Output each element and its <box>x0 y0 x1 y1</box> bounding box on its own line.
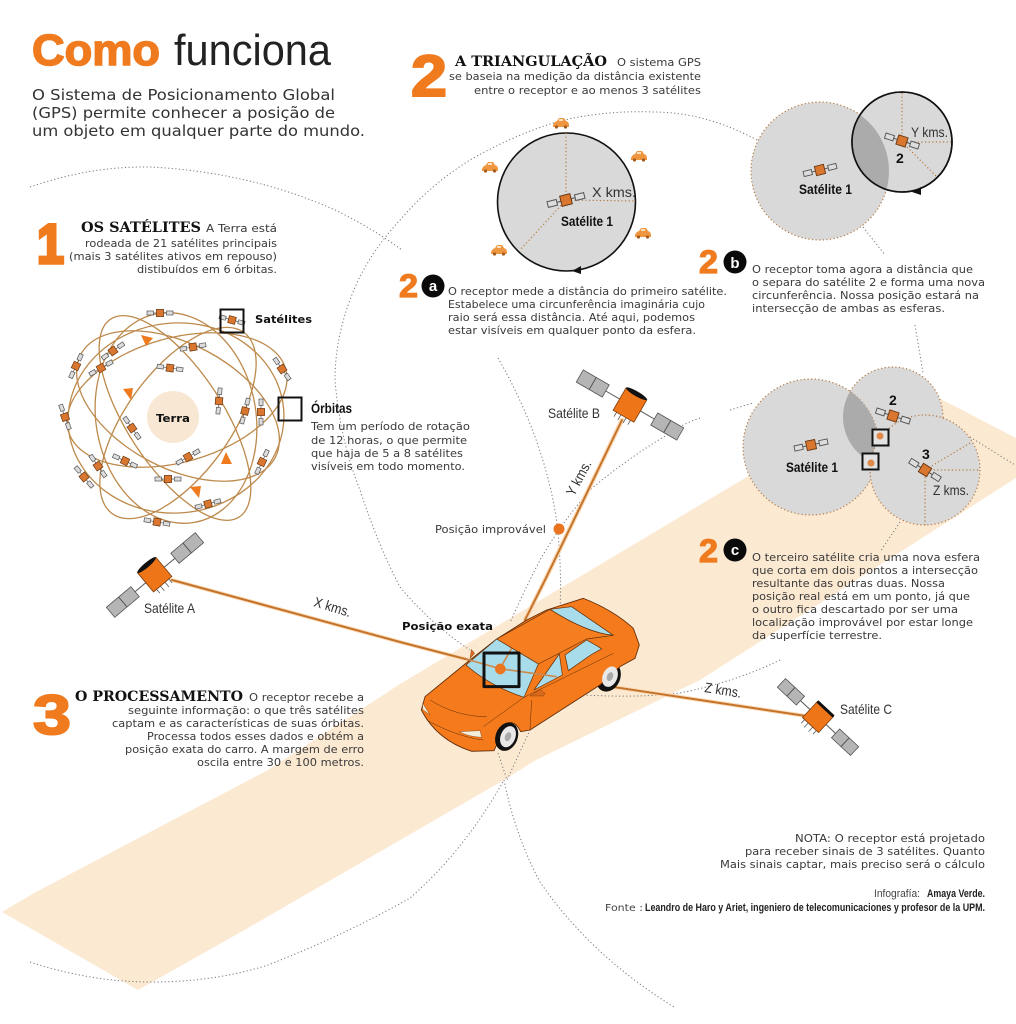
satellite A: Satélite A <box>144 600 196 616</box>
section 2 heading: 2 <box>411 44 447 109</box>
diagram 2b: two spheres: Y kms. <box>911 124 948 140</box>
windshield <box>466 639 538 697</box>
label 2a and text: estar visíveis em qualquer ponto da esfera. <box>448 324 696 337</box>
credits <box>605 888 985 914</box>
label 2c and text: posição real está em um ponto, já que <box>752 590 970 603</box>
intro text <box>32 86 365 140</box>
section 3: seguinte informação: o que três satélites <box>128 704 364 717</box>
title <box>32 26 331 75</box>
note: Mais sinais captar, mais preciso será o cálculo <box>720 858 985 871</box>
title: funciona <box>174 26 331 75</box>
diagram 2c: three spheres: Z kms. <box>933 482 969 498</box>
orbits marker and text: visíveis em todo momento. <box>311 460 465 473</box>
diagram 2b: two spheres <box>751 92 952 240</box>
label 2c and text: que corta em dois pontos a intersecção <box>752 564 978 577</box>
label 2b and text: intersecção de ambas as esferas. <box>752 302 945 315</box>
diagram 2a: one sphere <box>482 118 651 274</box>
lines through the windshield <box>466 648 557 677</box>
orbit diagram <box>51 293 304 544</box>
satellite B <box>548 363 688 450</box>
diagram 2b: two spheres: 2 <box>896 150 904 166</box>
credits: Amaya Verde. <box>927 888 985 900</box>
exact position marker <box>495 664 506 674</box>
section 3: O receptor recebe a <box>249 691 364 704</box>
intersection <box>852 116 889 189</box>
label 2a and text: O receptor mede a distância do primeiro satélite. <box>448 285 727 298</box>
label 2b and text: o separa do satélite 2 e forma uma nova <box>752 276 985 289</box>
orbits marker and text: Órbitas <box>311 399 352 416</box>
section 3: captam e as características de suas órbitas. <box>112 717 364 730</box>
satellite C: Satélite C <box>840 701 892 717</box>
label 2b and text <box>699 244 985 315</box>
orbits marker and text: Tem um período de rotação <box>310 420 470 433</box>
note: NOTA: O receptor está projetado <box>795 832 985 845</box>
label 2b and text: 2 <box>699 244 718 280</box>
section 3: 3 <box>33 683 71 746</box>
diagram 2b: two spheres: Satélite 1 <box>799 181 852 197</box>
headlights <box>459 731 482 737</box>
roof <box>497 609 613 664</box>
label 2a and text: a <box>429 278 438 295</box>
side windows <box>534 654 562 690</box>
section 1 heading: (mais 3 satélites ativos em repouso) <box>69 250 277 263</box>
section 3: Processa todos esses dados e obtém a <box>147 730 364 743</box>
intersection <box>843 392 876 456</box>
intro text: (GPS) permite conhecer a posição de <box>32 104 335 122</box>
label 2b and text: b <box>730 255 740 272</box>
exact position label: Posição exata <box>402 620 493 633</box>
label 2c and text: 2 <box>699 533 718 569</box>
label 2a and text: Estabelece uma circunferência imaginária cujo <box>448 298 705 311</box>
wheels <box>491 719 522 754</box>
section 2 heading: entre o receptor e ao menos 3 satélites <box>474 84 701 97</box>
orbits marker and text: de 12 horas, o que permite <box>311 434 467 447</box>
label 2c and text: O terceiro satélite cria uma nova esfera <box>752 551 980 564</box>
label 2a and text: raio será essa distância. Até aqui, podemos <box>448 311 695 324</box>
orbits marker and text: que haja de 5 a 8 satélites <box>311 447 463 460</box>
earth label: Terra <box>156 412 190 425</box>
diagram 2c: three spheres <box>743 367 980 525</box>
label 2b and text: circunferência. Nossa posição estará na <box>752 289 979 302</box>
orbits <box>51 293 304 544</box>
section 2 heading: O sistema GPS <box>617 56 701 69</box>
note: para receber sinais de 3 satélites. Quanto <box>745 845 985 858</box>
label 2a and text <box>399 268 727 337</box>
intersection point markers <box>862 430 888 470</box>
section 3 <box>33 683 364 769</box>
credits: Infografía: <box>874 888 920 900</box>
rear wheel <box>591 658 625 695</box>
section 3: posição exata do carro. A margem de erro <box>125 743 364 756</box>
section 1 heading: OS SATÉLITES <box>81 218 201 236</box>
label 2c and text: c <box>731 542 739 559</box>
satellites marker and label <box>220 310 312 332</box>
section 1 heading: distibuídos em 6 órbitas. <box>137 263 277 276</box>
section 1 heading: 1 <box>37 212 64 275</box>
title: Como <box>32 26 160 75</box>
section 3: oscila entre 30 e 100 metros. <box>197 756 364 769</box>
diagram 2a: one sphere: X kms. <box>592 184 636 200</box>
section 2 heading <box>411 44 701 109</box>
diagram 2c: three spheres: Satélite 1 <box>786 459 838 475</box>
label 2c and text: o outro fica descartado por ser uma <box>752 603 958 616</box>
distance labels: X kms. <box>312 594 353 620</box>
label 2c and text: da superfície terrestre. <box>752 629 882 642</box>
diagram 2c: three spheres: 2 <box>889 392 897 408</box>
small cars <box>482 118 651 256</box>
distance labels <box>312 457 743 701</box>
distance labels: Z kms. <box>704 679 743 701</box>
improbable position: Posição improvável <box>435 523 546 536</box>
mirrors <box>530 689 545 696</box>
section 2 heading: A TRIANGULAÇÃO <box>454 51 607 70</box>
satellite A <box>101 526 211 626</box>
intro text: O Sistema de Posicionamento Global <box>32 86 335 104</box>
orbits marker and text <box>278 398 470 473</box>
diagram 2c: three spheres: 3 <box>922 446 930 462</box>
credits: Fonte : <box>605 903 643 914</box>
orbit arrows <box>123 335 232 498</box>
signal lines <box>172 420 806 716</box>
label 2a and text: 2 <box>399 268 418 304</box>
section 1 heading: A Terra está <box>206 222 277 235</box>
label 2c and text: resultante das outras duas. Nossa <box>752 577 945 590</box>
distance labels: Y kms. <box>563 457 594 498</box>
label 2c and text: localização improvável por estar longe <box>752 616 973 629</box>
road band <box>2 382 1016 990</box>
rear window <box>550 607 613 635</box>
car <box>421 598 639 754</box>
car body <box>421 598 639 751</box>
satellites marker and label: Satélites <box>255 313 312 326</box>
door and hood lines <box>427 653 613 740</box>
diagram 2a: one sphere: Satélite 1 <box>561 213 613 229</box>
section 2 heading: se baseia na medição da distância existente <box>449 70 701 83</box>
label 2b and text: O receptor toma agora a distância que <box>752 263 973 276</box>
label 2c and text <box>699 533 980 642</box>
rotation arrow <box>572 266 581 274</box>
orbit satellites <box>57 309 292 528</box>
satellite B: Satélite B <box>548 405 600 421</box>
section 1 heading: rodeada de 21 satélites principais <box>85 237 277 250</box>
note <box>720 832 985 871</box>
satellite C <box>770 675 892 764</box>
section 1 heading <box>37 212 277 276</box>
intro text: um objeto em qualquer parte do mundo. <box>32 122 365 140</box>
section 3: O PROCESSAMENTO <box>75 689 243 705</box>
earth <box>147 391 199 443</box>
